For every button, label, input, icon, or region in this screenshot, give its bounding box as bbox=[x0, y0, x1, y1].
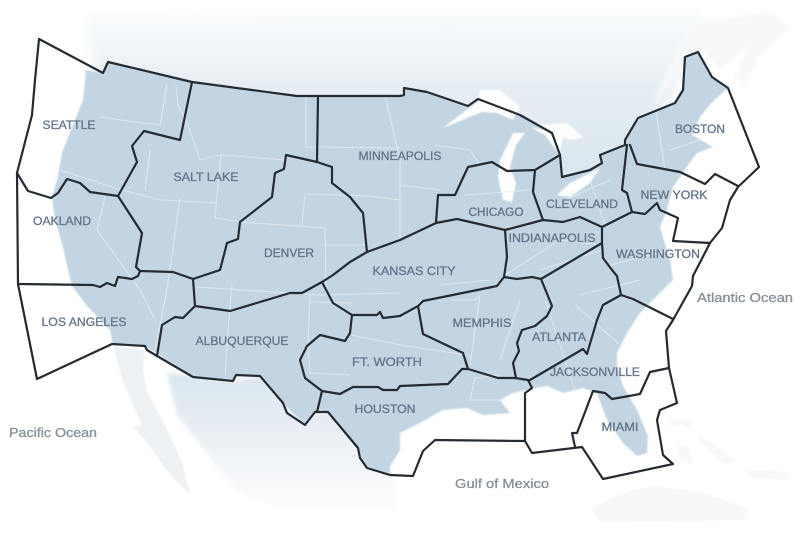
boundary: Ft. Worth bbox=[300, 315, 532, 441]
boundary: Denver and Albuquerque bbox=[193, 212, 632, 311]
boundary: Albuquerque west bbox=[157, 306, 195, 356]
label: Chicago: CHICAGO bbox=[468, 205, 524, 219]
label: Los Angeles: LOS ANGELES bbox=[42, 315, 126, 329]
label: Boston: BOSTON bbox=[675, 122, 725, 136]
Atlantic Canada faint coast bbox=[650, 12, 790, 110]
label: Atlantic Ocean: Atlantic Ocean bbox=[697, 291, 793, 305]
label: Albuquerque: ALBUQUERQUE bbox=[196, 334, 288, 348]
label: Houston: HOUSTON bbox=[354, 402, 416, 416]
label: Memphis: MEMPHIS bbox=[452, 316, 512, 330]
Great Lakes bbox=[443, 90, 600, 202]
label: Washington: WASHINGTON bbox=[616, 247, 700, 261]
boundary: Indianapolis and Washington bbox=[504, 227, 673, 319]
boundary: Memphis and Atlanta bbox=[418, 279, 552, 378]
boundary: Boston and New York bbox=[622, 145, 738, 243]
label: Seattle: SEATTLE bbox=[42, 118, 96, 132]
label: Atlanta: ATLANTA bbox=[532, 330, 586, 344]
state boundary lines bbox=[60, 84, 700, 400]
label: Indianapolis: INDIANAPOLIS bbox=[508, 231, 596, 245]
label: Salt Lake: SALT LAKE bbox=[174, 170, 238, 184]
label: Pacific Ocean: Pacific Ocean bbox=[9, 426, 97, 440]
label: Kansas City: KANSAS CITY bbox=[372, 264, 456, 278]
region boundaries bbox=[17, 39, 759, 479]
Mexico bbox=[167, 373, 400, 518]
label: Ft. Worth: FT. WORTH bbox=[352, 355, 422, 369]
boundary: Minneapolis west bbox=[317, 96, 318, 162]
boundary: Kansas City south bbox=[322, 277, 504, 318]
Baja California bbox=[113, 346, 190, 495]
label: Cleveland: CLEVELAND bbox=[546, 197, 618, 211]
boundary: Chicago and Cleveland bbox=[436, 155, 560, 223]
boundary: outer Pacific and northern edge bbox=[17, 39, 759, 479]
boundary: Seattle and Salt Lake bbox=[17, 82, 192, 198]
label: Jacksonville: JACKSONVILLE bbox=[550, 365, 640, 379]
boundary: Oakland and Los Angeles bbox=[18, 196, 142, 287]
boundary: Salt Lake and Denver bbox=[140, 155, 367, 279]
label: Denver: DENVER bbox=[264, 246, 314, 260]
United States landmass bbox=[52, 52, 728, 475]
label: Minneapolis: MINNEAPOLIS bbox=[358, 149, 442, 163]
label: Miami: MIAMI bbox=[602, 420, 638, 434]
background: Canada sky gradient bbox=[85, 10, 705, 205]
label: Gulf of Mexico: Gulf of Mexico bbox=[455, 477, 549, 491]
label: Oakland: OAKLAND bbox=[33, 214, 91, 228]
label: New York: NEW YORK bbox=[640, 188, 708, 202]
Cuba and Caribbean islands bbox=[590, 418, 790, 522]
boundary: Jacksonville and Miami bbox=[530, 295, 669, 447]
